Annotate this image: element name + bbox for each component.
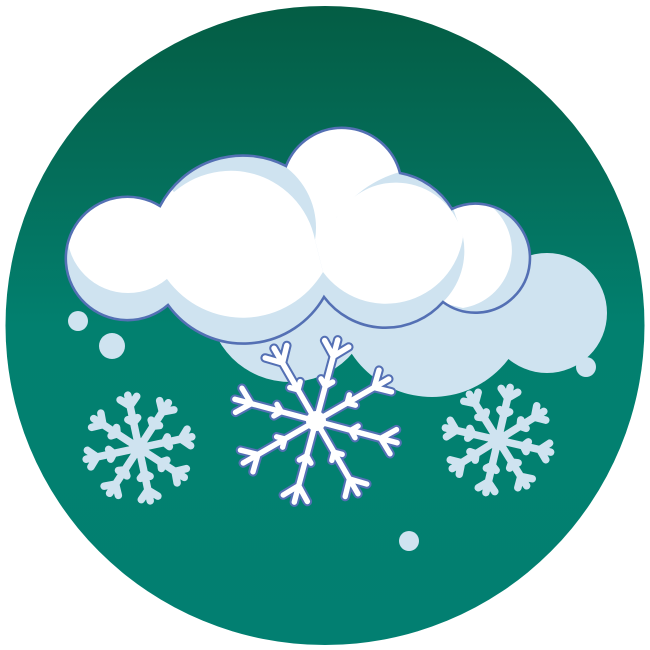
- icon: centre snowflake: [232, 337, 400, 505]
- snow dot right: [576, 357, 596, 377]
- snow dot bottom: [399, 531, 419, 551]
- front cloud: [66, 110, 530, 344]
- snow dot left lower: [99, 333, 125, 359]
- snow dot left upper: [68, 311, 88, 331]
- icon: right snowflake: [433, 375, 563, 505]
- back cloud: [208, 205, 607, 397]
- icon: left snowflake: [75, 384, 203, 512]
